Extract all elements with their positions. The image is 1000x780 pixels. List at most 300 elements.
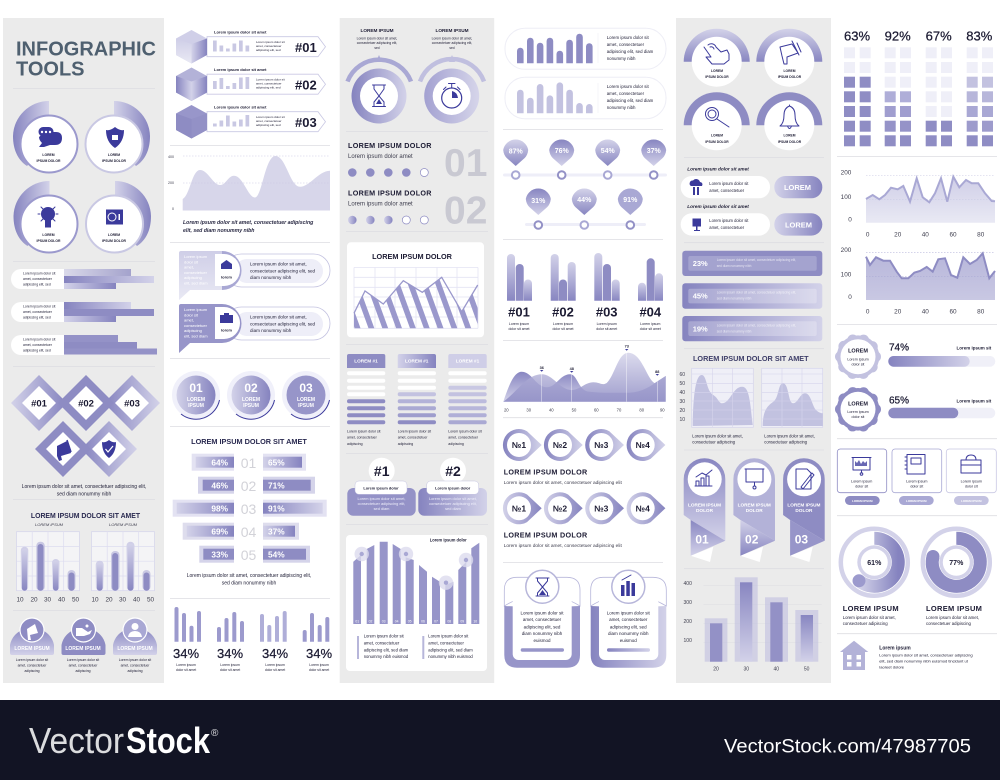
panel: ten-bar chart card: adipiscing elit, sed diam (364, 647, 409, 652)
chart: layered vertical bars: 100 (684, 638, 692, 644)
text block: donut 77 caption: Lorem ipsum dolor sit amet, (926, 615, 979, 620)
ribbon 03 (783, 458, 825, 562)
bar row 1: amet, consectetuer (23, 277, 53, 281)
list column 2: amet, consectetuer (398, 436, 428, 440)
chart: mountain area with markers: 50 (572, 408, 577, 412)
circle 02: 02 (244, 381, 258, 395)
arch: hand pointer: LOREM (711, 69, 723, 73)
chart: butterfly percent bars: 65% (268, 458, 285, 468)
panel: pill with button row 2 (681, 204, 822, 236)
card: hourglass: euismod (533, 638, 551, 643)
card: presentation: LOREM IPSUM (852, 499, 873, 503)
panel: badge progress 65%: LOREM (848, 401, 868, 407)
chart: butterfly percent bars: 64% (211, 458, 229, 468)
panel: rating block 02: Lorem ipsum dolor amet (348, 202, 413, 208)
dial: stopwatch: consectetuer adipiscing elit, (432, 41, 472, 45)
dome 2: hand: Lorem ipsum dolor sit (67, 658, 99, 662)
chart: left grid bars: 50 (72, 596, 79, 604)
donut: 77% (923, 529, 990, 596)
chart: grid area right (762, 368, 823, 444)
callout: #2: Lorem ipsum dolor sit amet, (429, 496, 477, 501)
card: chart: diam nonummy nibh (608, 631, 649, 636)
title: INFOGRAPHIC (16, 38, 156, 60)
pin 87%: 87% (509, 148, 523, 156)
text block: donut 77 caption (926, 604, 982, 626)
panel: ten-bar chart card: amet, consectetuer (428, 640, 465, 646)
panel: square grid percentages (844, 29, 993, 146)
banner #01: #01 (295, 40, 317, 55)
panel: callout 2: Lorem ipsum (184, 307, 208, 312)
panel: map pin timeline row 1 (503, 140, 667, 179)
list column 1: amet, consectetuer (347, 436, 378, 440)
text block: № row 1 (504, 468, 622, 486)
panel: percent box 23%: Lorem ipsum dolor sit amet, consectetuer adipiscing elit, (717, 258, 796, 262)
pin №4 (627, 492, 665, 524)
panel: callout 2: amet, (184, 318, 194, 322)
banner #02 (176, 67, 326, 101)
bars 01-10 (353, 542, 479, 624)
group 1: dolor sit amet (176, 668, 196, 672)
group 3 (260, 611, 288, 672)
group 2: 34% (217, 646, 243, 661)
arch: hand pointer: IPSUM DOLOR (705, 75, 729, 79)
panel: ten-bar chart card: Lorem ipsum dolor (430, 538, 467, 542)
panel: pill bar chart 2: nonummy nibh (607, 105, 636, 110)
panel: callout 1: Lorem ipsum dolor sit amet, (250, 262, 307, 266)
group #03 (594, 253, 620, 331)
icon: shield: LOREM (108, 153, 120, 157)
pin №2: №2 (553, 503, 567, 513)
chart: layered vertical bars: 300 (684, 600, 692, 606)
chart: line area top: 100 (841, 194, 852, 201)
chart: layered vertical bars (684, 577, 822, 672)
banner #03: adipiscing elit, sed (256, 123, 281, 127)
icon: light bulb: LOREM (42, 233, 55, 237)
group 3: dolor sit amet (265, 668, 285, 672)
grid 83% (966, 29, 993, 146)
dial: hourglass: consectetuer adipiscing elit, (357, 41, 397, 45)
card: chart: Lorem ipsum dolor sit (607, 610, 651, 615)
card: presentation (837, 449, 887, 505)
chart: grid area left: 10 (680, 417, 685, 423)
panel: hatched line chart card (347, 242, 484, 337)
panel: callout 1: lorem (221, 274, 232, 280)
panel: icon cards (837, 449, 996, 505)
chart: grid area left (680, 368, 753, 444)
chart: butterfly percent bars (173, 454, 327, 563)
panel: column 1 background (3, 18, 164, 683)
callout: #2: consectetuer adipiscing elit, (429, 501, 477, 506)
list column 3: amet, consectetuer (448, 436, 479, 440)
pin №3: №3 (594, 503, 609, 513)
banner #02: Lorem ipsum dolor sit (256, 78, 285, 82)
panel: pill bar chart 2: Lorem ipsum dolor sit (607, 84, 649, 89)
panel: ten-bar chart card: 04 (395, 620, 399, 624)
banner #02: #02 (295, 78, 317, 92)
list column 3: adipiscing (448, 442, 464, 446)
panel: callout 2: dolor sit (184, 312, 199, 317)
chart: butterfly percent bars: 04 (241, 524, 256, 540)
group 4: 34% (306, 646, 332, 661)
chart: butterfly percent bars: 05 (241, 547, 256, 563)
callout: #1: Lorem ipsum dolor (363, 486, 399, 490)
panel: ten-bar chart card: 01 (355, 620, 359, 624)
heading: column 1 bar charts: LOREM IPSUM DOLOR SIT AMET (31, 513, 141, 520)
chart: grid area right: Lorem ipsum dolor sit amet, (764, 434, 815, 438)
panel: callout 1: consectetuer (184, 270, 208, 275)
panel: percent box 23%: 23% (693, 259, 708, 268)
panel: column 3 background (340, 18, 494, 683)
pin №3 (585, 492, 624, 524)
icon: chat bubble: LOREM (42, 153, 55, 157)
dome 3: person: LOREM IPSUM (117, 646, 153, 652)
panel: callout 2: elit, sed diam (184, 333, 208, 338)
panel: callout 2: lorem (221, 328, 232, 332)
banner #01: amet, consectetuer (256, 44, 282, 48)
donut: 77%: 77% (949, 560, 964, 567)
group 2 (217, 612, 244, 672)
card: briefcase: dolor sit (965, 484, 978, 488)
panel: callout 2: adipiscing (184, 328, 202, 333)
chart: grid area left: 50 (680, 381, 685, 387)
ribbon 01: 01 (695, 532, 709, 546)
text block: butterfly caption (187, 573, 311, 586)
dial: hourglass: LOREM IPSUM (360, 28, 394, 33)
panel: percent box 19%: sed diam nonummy nibh (717, 329, 752, 333)
panel: callout 1: amet, (184, 264, 194, 270)
diamond: shield check (81, 421, 137, 477)
bar row 3: Lorem ipsum dolor sit (23, 338, 55, 342)
chart: grid area left: consectetuer adipiscing (692, 440, 736, 444)
group 3: 34% (262, 646, 288, 661)
chart: line area bottom (841, 247, 995, 315)
panel: ten-bar chart card: Lorem ipsum dolor sit (428, 634, 469, 639)
group #01: dolor sit amet (508, 327, 530, 331)
chart: line area bottom: 200 (841, 247, 852, 254)
panel: pill bar chart 2 (505, 77, 666, 119)
list column 1: Lorem ipsum dolor sit (347, 430, 380, 434)
circle 02 (227, 371, 275, 419)
chart: line area bottom: 0 (866, 308, 870, 315)
banner #01: adipiscing elit, sed (256, 48, 281, 52)
panel: cube banners (176, 30, 326, 138)
circle 02: IPSUM (243, 403, 259, 409)
list column 1: LOREM #1 (354, 358, 378, 364)
chart: left grid bars: 30 (44, 596, 51, 604)
panel: pill with button row 1: Lorem ipsum dolor sit amet (687, 166, 749, 172)
text block: house caption: laoreet dolore (879, 665, 905, 670)
panel: dome icons (10, 618, 157, 673)
dial: stopwatch (420, 28, 484, 124)
chart: mountain area with markers: 90 (660, 408, 665, 412)
card: chart: euismod (620, 638, 637, 643)
dome 1: megaphone: adipiscing (24, 669, 40, 673)
pin №1: №1 (512, 440, 526, 450)
chart: area 400/200/0: 200 (168, 181, 174, 185)
text block: diamonds caption (22, 484, 146, 498)
panel: percent box 45%: 45% (693, 292, 708, 301)
panel: rating block 01: Lorem ipsum dolor amet (348, 154, 413, 160)
panel: pill with button row 2: Lorem ipsum dolor sit amet (687, 204, 749, 209)
bar row 1: Lorem ipsum dolor sit (23, 272, 55, 276)
text block: house caption: Lorem ipsum dolor sit amet, consectetuer adipiscing (879, 653, 973, 658)
banner #01: Lorem ipsum dolor sit amet (214, 30, 267, 34)
chart: layered vertical bars: 400 (684, 581, 692, 587)
card: hourglass: adipiscing elit, sed (524, 624, 561, 629)
ribbon 02: DOLOR (746, 508, 763, 513)
panel: № pins dark row (503, 492, 665, 524)
chart: mountain area with markers: 30 (526, 408, 532, 412)
dome 3: person: Lorem ipsum dolor sit (119, 658, 151, 662)
footer bar: Vector (29, 720, 124, 761)
pin 76% (549, 140, 574, 179)
chart: area 400/200/0: 400 (168, 155, 174, 159)
chart: mountain area with markers: 36 (540, 366, 544, 370)
chart: butterfly percent bars: 46% (211, 480, 229, 490)
circle 02: LOREM (242, 397, 260, 403)
panel: badge progress 65%: Lorem ipsum (847, 410, 869, 414)
banner #01: Lorem ipsum dolor sit (256, 40, 285, 44)
chart: grid area left: Lorem ipsum dolor sit amet, (692, 434, 743, 438)
dial: hourglass (348, 28, 411, 124)
group 4 (303, 613, 332, 672)
chart: butterfly percent bars: 37% (268, 526, 285, 536)
panel: percent box 19% (682, 316, 822, 341)
chart: line area bottom: 80 (977, 308, 985, 315)
panel: percent box 19%: Lorem ipsum dolor sit amet, consectetuer adipiscing elit, (717, 323, 796, 327)
panel: rating block 01: LOREM IPSUM DOLOR (348, 141, 432, 150)
panel: pill bar chart 1: adipiscing elit, sed diam (607, 49, 654, 54)
grid 67% (926, 29, 952, 146)
footer bar: Stock (126, 720, 211, 761)
dial: stopwatch: Lorem ipsum dolor sit amet, (432, 36, 472, 40)
panel: badge progress 74%: 74% (889, 342, 909, 353)
pin 91%: 91% (623, 197, 638, 204)
banner #02: amet, consectetuer (256, 82, 282, 86)
chart: line area top: 200 (841, 170, 852, 176)
panel: pill with button row 1 (681, 166, 822, 198)
panel: percent box 45%: Lorem ipsum dolor sit amet, consectetuer adipiscing elit, (717, 291, 796, 295)
banner #03: amet, consectetuer (256, 119, 282, 123)
callout: #1: #1 (374, 463, 390, 479)
card: briefcase: LOREM IPSUM (961, 499, 982, 503)
group 2: Lorem ipsum (220, 663, 240, 667)
pin 31%: 31% (531, 198, 546, 205)
chart: butterfly percent bars: 71% (268, 480, 285, 490)
panel: ten-bar chart card: adipiscing elit, sed diam (428, 647, 473, 652)
card: chart (591, 570, 666, 668)
pin №4: №4 (636, 440, 650, 450)
group #04 (638, 258, 663, 331)
panel: badge progress 65% (837, 388, 995, 431)
chart: butterfly percent bars: 91% (268, 504, 285, 514)
chart: grid area left: 30 (680, 399, 685, 405)
panel: pill bar chart 2: amet, consectetuer (607, 91, 645, 96)
card: briefcase (946, 449, 996, 505)
chart: butterfly percent bars: 98% (211, 504, 229, 514)
text block: house caption: elit, sed diam nonummy nibh euismod tincidunt ut (879, 659, 969, 664)
banner #03: Lorem ipsum dolor sit (256, 115, 285, 119)
panel: callout 2: consectetuer adipiscing elit, sed (250, 321, 316, 326)
chart: butterfly percent bars: 01 (241, 455, 256, 471)
group #01: #01 (508, 305, 530, 320)
callout: #2: sed diam (445, 506, 461, 511)
chart: area 400/200/0: 0 (172, 207, 174, 211)
dial: stopwatch: sed (449, 46, 455, 50)
panel: pill bar chart 1: Lorem ipsum dolor sit (607, 35, 649, 40)
card: hourglass: diam nonummy nibh (522, 631, 563, 636)
panel: ribbons (684, 458, 825, 562)
list column 1 (347, 354, 385, 446)
icon: safe: LOREM (108, 233, 120, 237)
dome 2: hand (62, 618, 106, 673)
text block: donut 61 caption: consectetuer adipiscing (843, 621, 888, 626)
chart: mountain area with markers: 40 (549, 408, 554, 412)
bar row 1: adipiscing elit, sed (23, 282, 51, 286)
pin №2: №2 (553, 440, 567, 450)
dome 3: person: amet, consectetuer (121, 664, 150, 668)
chart: left grid bars: 40 (58, 596, 65, 604)
card: notebook: Lorem ipsum (906, 480, 927, 484)
text block: house caption: Lorem ipsum (879, 645, 911, 651)
arch: megaphone outline (756, 29, 822, 87)
chart: line area top: 20 (894, 232, 902, 239)
chart: butterfly percent bars: 33% (211, 550, 229, 560)
chart: line area top: 80 (977, 232, 985, 239)
arch: bell (756, 92, 822, 150)
panel: arch icons (684, 29, 822, 150)
chart: right grid bars: 30 (119, 596, 126, 604)
card: notebook: LOREM IPSUM (906, 499, 927, 503)
panel: badge progress 74%: Lorem ipsum sit (957, 346, 992, 350)
text block: donut 77 caption: consectetuer adipiscing (926, 621, 972, 626)
group 2: dolor sit amet (220, 668, 240, 672)
panel: ten-bar chart card: 09 (460, 620, 464, 624)
text block: № row 2: LOREM IPSUM DOLOR (504, 530, 588, 540)
dome 1: megaphone: Lorem ipsum dolor sit (16, 658, 48, 662)
chart: grid area left: 20 (680, 408, 685, 414)
text block: donut 77 caption: LOREM IPSUM (926, 604, 982, 613)
chart: line area bottom: 0 (848, 294, 852, 301)
icon: light bulb: IPSUM DOLOR (37, 239, 61, 243)
arch: magnifier (684, 92, 750, 150)
panel: № pins light row (503, 429, 665, 461)
card: chart: amet, consectetuer (609, 617, 648, 622)
chart: line area bottom: 60 (949, 308, 957, 315)
ribbon 01 (684, 458, 725, 562)
group #04: dolor sit amet (640, 327, 661, 331)
panel: badge progress 65%: dolor sit (852, 415, 864, 419)
panel: ten-bar chart card: 10 (473, 620, 477, 624)
group #03: Lorem ipsum (597, 322, 617, 326)
panel: callout 1: adipiscing (184, 275, 202, 280)
arch: bell: LOREM (784, 134, 796, 138)
dome 1: megaphone: LOREM IPSUM (14, 646, 50, 652)
dome 3: person: adipiscing (127, 669, 143, 673)
panel: percent box 19%: 19% (693, 324, 708, 333)
arch: magnifier: LOREM (711, 134, 723, 138)
footer bar (0, 700, 1000, 780)
chart: mountain area with markers: 20 (504, 408, 509, 412)
chart: line area bottom: 40 (922, 308, 929, 315)
pin №1: №1 (512, 503, 526, 513)
group #02: #02 (552, 305, 574, 320)
chart: right grid bars: 20 (105, 596, 113, 604)
panel: ten-bar chart card: 03 (382, 620, 386, 624)
panel: percent box 23%: sed diam nonummy nibh (717, 264, 752, 268)
panel: pill with button row 2: Lorem ipsum dolor sit (709, 218, 749, 223)
panel: rating block 02: 02 (444, 190, 487, 232)
panel: ten-bar chart card: Lorem ipsum dolor sit (364, 634, 405, 639)
panel: ten-bar chart card: 07 (434, 620, 438, 624)
panel: badge progress 74%: dolor sit (852, 362, 864, 366)
chart: left grid bars: LOREM IPSUM (35, 522, 64, 527)
panel: pill bar chart 1 (505, 28, 666, 69)
bar row 2: Lorem ipsum dolor sit (23, 304, 55, 308)
panel: callout 2: Lorem ipsum dolor sit amet, (250, 314, 307, 320)
bar row 2: adipiscing elit, sed (23, 316, 51, 320)
card: presentation: Lorem ipsum (851, 480, 872, 484)
circle 01: LOREM (187, 397, 205, 403)
dome 1: megaphone (10, 618, 54, 673)
text block: donut 61 caption (843, 604, 899, 626)
group #02 (551, 254, 576, 331)
dial: hourglass: sed (374, 46, 380, 50)
panel: swoosh circle icons (13, 101, 151, 252)
diamond #03 (104, 375, 160, 431)
diamond #01: #01 (31, 398, 48, 410)
ribbon 03: DOLOR (795, 508, 813, 513)
panel: pill with button row 2: amet, consectetuer (709, 225, 745, 230)
grid 63%: 63% (844, 29, 870, 44)
chart: layered vertical bars: 30 (744, 666, 749, 672)
bar row 3: adipiscing elit, sed (23, 348, 51, 352)
chart: mountain area with markers (503, 344, 666, 412)
circle 03: LOREM (297, 397, 315, 403)
text block: № row 1: LOREM IPSUM DOLOR (504, 468, 588, 476)
callout: #2 (418, 458, 487, 516)
chart: mountain area with markers: 80 (639, 408, 645, 412)
panel: badge progress 74%: Lorem ipsum (847, 357, 869, 361)
ribbon 02 (733, 458, 775, 562)
icon: chat bubble (13, 101, 78, 172)
pin №3: №3 (594, 440, 609, 450)
chart: line area top (841, 170, 995, 239)
card: briefcase: Lorem ipsum (961, 480, 982, 484)
text block: diamonds caption: Lorem ipsum dolor sit amet, consectetuer adipiscing elit, (22, 484, 146, 490)
icon: shield (86, 101, 150, 172)
card: notebook (892, 449, 942, 505)
chart: left grid bars: 20 (30, 596, 38, 604)
pin 37% (641, 140, 666, 179)
bar row 1 (11, 269, 154, 289)
pin №2 (544, 429, 583, 461)
dial: hourglass: Lorem ipsum dolor sit amet, (357, 36, 397, 40)
panel: percent box 45%: sed diam nonummy nibh (717, 297, 752, 301)
panel: pill bar chart 1: nonummy nibh (607, 56, 636, 61)
panel: percent box 23% (682, 251, 822, 276)
donut: 61% (841, 529, 908, 596)
icon: house (840, 641, 868, 670)
group #03: dolor sit amet (596, 327, 617, 331)
panel: ten-bar chart card: 02 (369, 620, 372, 624)
chart: left grid bars (16, 522, 80, 604)
panel: badge progress 65%: Lorem ipsum sit (957, 398, 992, 403)
chart: mountain area with markers: 60 (594, 408, 599, 412)
text block: butterfly caption: Lorem ipsum dolor sit amet, consectetuer adipiscing elit, (187, 573, 311, 579)
panel: callout 2: consectetuer (184, 323, 208, 328)
text block: donut 61 caption: LOREM IPSUM (843, 604, 899, 613)
